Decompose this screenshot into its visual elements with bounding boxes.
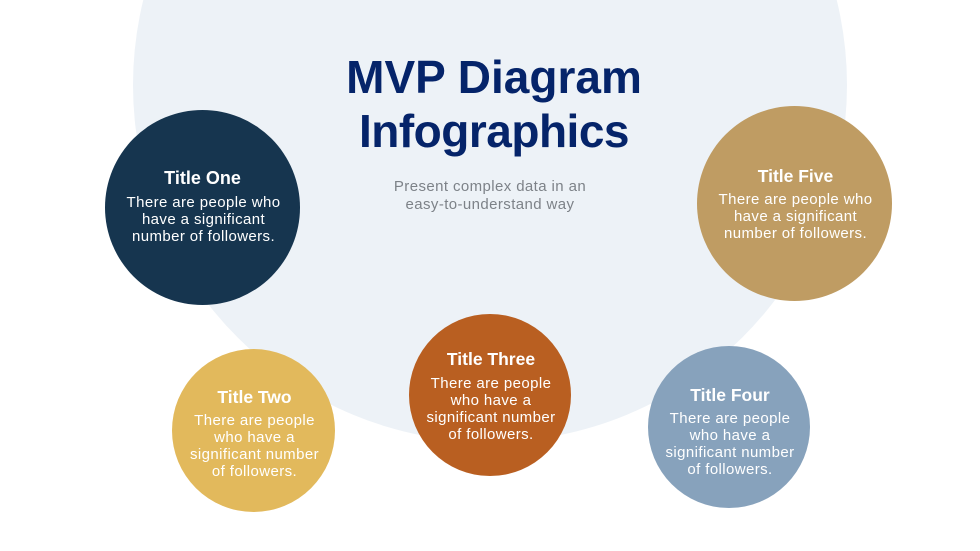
text: title four <box>666 410 794 478</box>
text: title one: There are people who <box>127 194 280 211</box>
text: title one: number of followers. <box>132 228 275 245</box>
text: title five: have a significant <box>734 208 857 225</box>
text: title two: significant number <box>190 446 319 463</box>
text: title four: of followers. <box>687 461 773 478</box>
text: title three: of followers. <box>448 426 534 443</box>
text: title four: significant number <box>666 444 794 461</box>
subtitle: Present complex data in an <box>394 178 586 195</box>
text: title one: have a significant <box>142 211 265 228</box>
text: title three <box>426 375 555 443</box>
text: title three: There are people <box>431 375 551 392</box>
circle: title two <box>172 349 335 512</box>
heading: title one: Title One <box>164 168 241 188</box>
text: title three: who have a <box>451 392 531 409</box>
text: title four: who have a <box>690 427 770 444</box>
text: title two: of followers. <box>212 463 297 480</box>
heading: title five: Title Five <box>758 166 833 186</box>
subtitle: easy-to-understand way <box>406 196 574 212</box>
text: title one <box>126 194 280 245</box>
background circle <box>133 0 847 442</box>
circle: title three <box>409 314 571 476</box>
circle: title four <box>648 346 810 508</box>
text: title five: There are people who <box>719 191 872 208</box>
text: title two: who have a <box>214 429 295 446</box>
text: title two: There are people <box>194 412 315 429</box>
heading: title four: Title Four <box>690 385 770 405</box>
circle: title five <box>697 106 892 301</box>
title: MVP Diagram <box>346 51 642 103</box>
text: title five <box>718 191 872 242</box>
text: title three: significant number <box>427 409 555 426</box>
heading: title three: Title Three <box>447 349 535 369</box>
text: title five: number of followers. <box>724 225 867 242</box>
subtitle <box>394 178 586 212</box>
text: title four: There are people <box>670 410 790 427</box>
heading: title two: Title Two <box>217 387 292 407</box>
title: Infographics <box>359 105 629 157</box>
title <box>346 51 642 157</box>
text: title two <box>190 412 319 480</box>
circle: title one <box>105 110 300 305</box>
